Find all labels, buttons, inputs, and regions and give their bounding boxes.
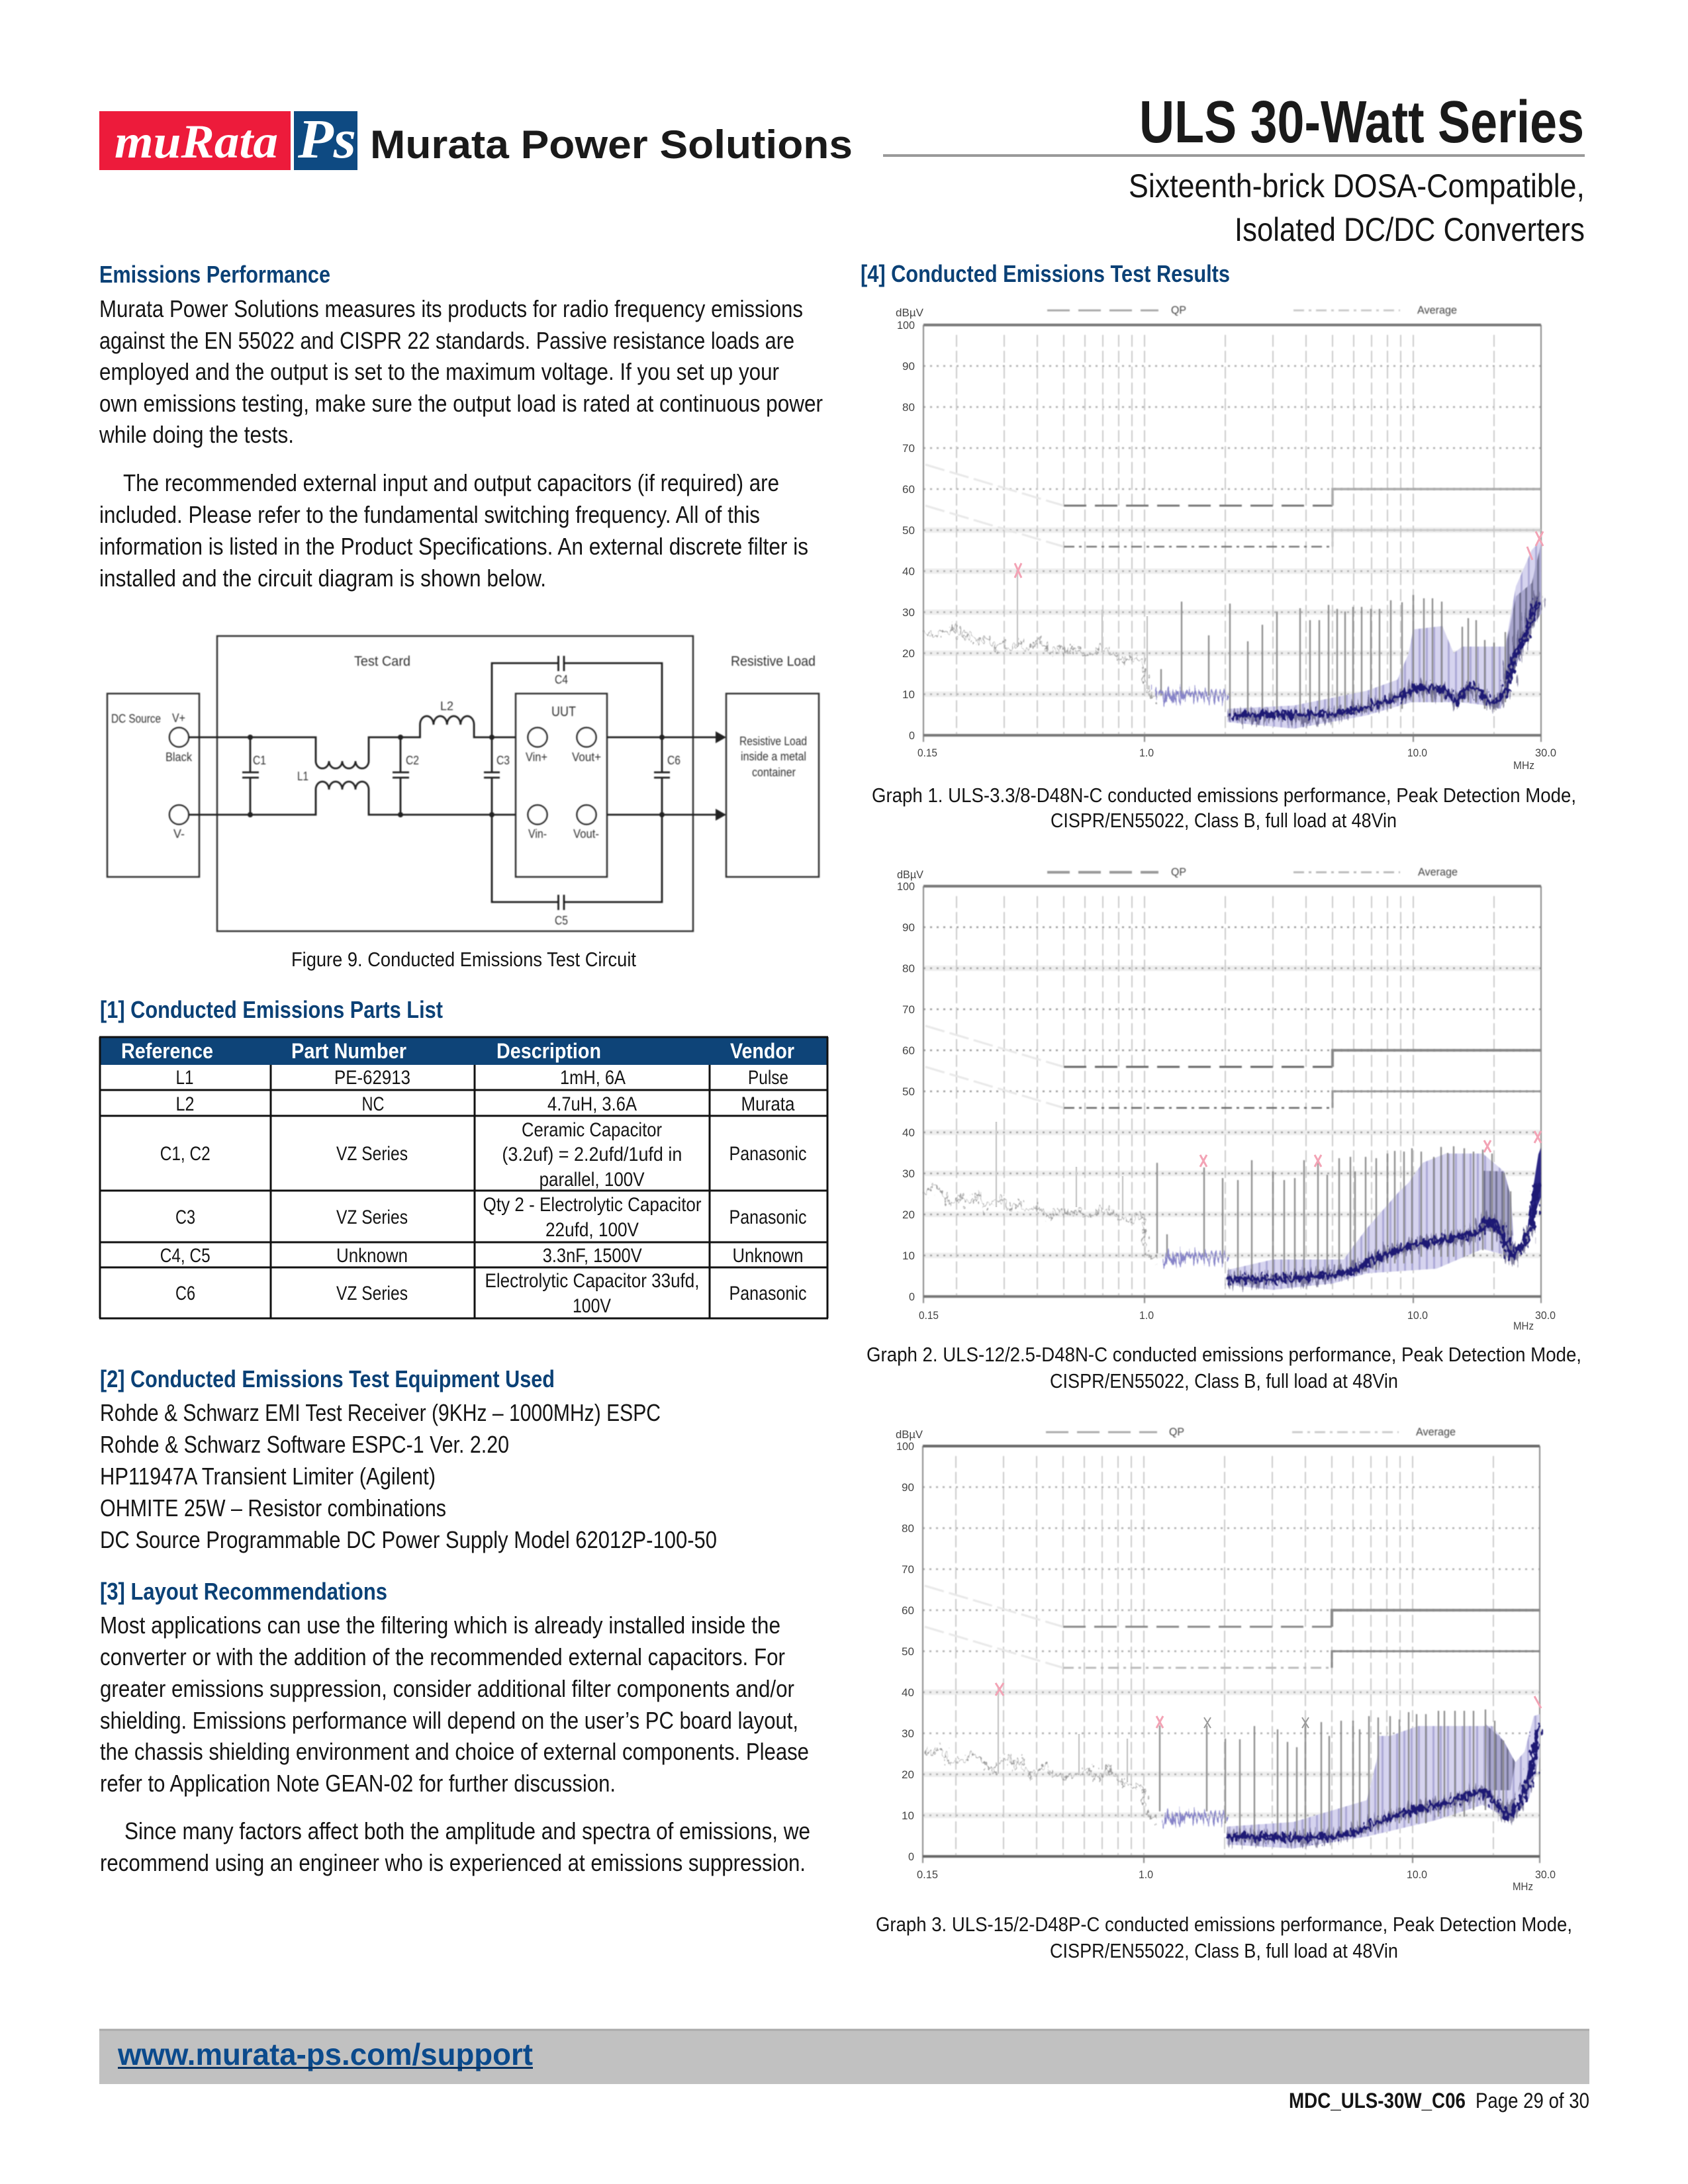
company name: Murata Power Solutions [370, 122, 853, 167]
axis labels: 70 [902, 1563, 914, 1576]
axis labels: 40 [902, 1126, 915, 1139]
axis labels: 90 [902, 1481, 914, 1494]
support link: www.murata-ps.com/support [117, 2037, 533, 2071]
section: emissions performance [99, 261, 823, 592]
table rows: Ceramic Capacitor [522, 1119, 662, 1141]
axis labels: 60 [902, 483, 915, 496]
heading: test results: [4] Conducted Emissions Test Results [861, 260, 1230, 287]
equipment list: OHMITE 25W – Resistor combinations [100, 1494, 446, 1522]
equipment list: Rohde & Schwarz EMI Test Receiver (9KHz – 1000MHz) ESPC [100, 1399, 661, 1426]
table rows: L2 [176, 1093, 195, 1115]
table rows: L1 [176, 1067, 193, 1089]
table rows [160, 1067, 806, 1317]
body text: converter or with the addition of the recommended external capacitors. For [100, 1643, 785, 1670]
axis labels: 0 [909, 1291, 915, 1303]
circuit labels: container [752, 766, 796, 779]
body text: installed and the circuit diagram is shown below. [99, 565, 546, 592]
body text: the chassis shielding environment and choice of external components. Please [100, 1738, 809, 1765]
axis labels [897, 868, 1556, 1332]
axis labels: 50 [902, 524, 915, 537]
subtitle: Isolated DC/DC Converters [1235, 211, 1585, 248]
chart: graph 1 [896, 304, 1556, 772]
axis labels: 60 [902, 1604, 914, 1617]
circuit labels: V- [173, 827, 185, 841]
body text: recommend using an engineer who is experienced at emissions suppression. [100, 1849, 806, 1876]
caption: graph 3 [876, 1913, 1572, 1962]
legend [1047, 304, 1457, 316]
heading: Emissions Performance [99, 261, 330, 288]
axis labels: 0 [909, 729, 915, 742]
axis labels: 100 [897, 319, 915, 332]
terminals [169, 728, 596, 825]
axis labels: 30.0 [1535, 1868, 1556, 1881]
axis labels: 60 [902, 1044, 915, 1057]
table rows: 3.3nF, 1500V [543, 1245, 642, 1267]
circuit labels: C4 [555, 673, 568, 686]
legend [1046, 1426, 1456, 1438]
header logo [99, 109, 853, 170]
table rows: PE-62913 [334, 1067, 410, 1089]
table rows: 4.7uH, 3.6A [547, 1093, 637, 1115]
body text: against the EN 55022 and CISPR 22 standards. Passive resistance loads are [99, 327, 794, 354]
body text: information is listed in the Product Specifications. An external discrete filter is [99, 533, 808, 560]
axis labels: 10 [902, 1250, 915, 1262]
axis labels: 0.15 [917, 1868, 938, 1881]
page reference: Page 29 of 30 [1476, 2089, 1589, 2113]
axis labels: 40 [902, 565, 915, 578]
logo: Murata red block: muRata [115, 115, 278, 168]
junction dots and arrows [248, 731, 726, 821]
axis labels: 30 [902, 606, 915, 619]
circuit labels: V+ [172, 711, 185, 725]
limit lines [925, 1026, 1541, 1108]
equipment list: Rohde & Schwarz Software ESPC-1 Ver. 2.20 [100, 1431, 509, 1458]
axis labels: 1.0 [1139, 1309, 1154, 1322]
boxes [107, 636, 819, 931]
axis labels: 30 [902, 1727, 914, 1740]
series title: ULS 30-Watt Series [1139, 89, 1584, 156]
circuit labels: Vin- [528, 827, 547, 841]
legend: Average [1418, 866, 1458, 878]
axis labels: 70 [902, 1003, 915, 1016]
table rows: Unknown [336, 1245, 408, 1267]
axis labels: 30 [902, 1167, 915, 1180]
body text: while doing the tests. [99, 421, 294, 448]
circuit labels: Vout- [573, 827, 599, 841]
table rows: C6 [175, 1283, 195, 1304]
table header: Part Number [291, 1039, 406, 1063]
legend: Average [1416, 1426, 1456, 1438]
table rows: (3.2uf) = 2.2ufd/1ufd in [502, 1144, 682, 1165]
axis labels: 50 [902, 1085, 915, 1098]
axis labels: 100 [897, 880, 915, 893]
table rows: 1mH, 6A [560, 1067, 626, 1089]
table rows: VZ Series [336, 1283, 408, 1304]
table rows: Panasonic [729, 1283, 806, 1304]
caption: graph 1 [872, 784, 1576, 832]
table header [99, 1037, 828, 1065]
axis labels: 1.0 [1139, 747, 1154, 759]
table rows: 100V [573, 1295, 611, 1317]
axis labels: 80 [902, 962, 915, 975]
table rows: C4, C5 [160, 1245, 211, 1267]
axis labels: 70 [902, 442, 915, 455]
table rows: Unknown [732, 1245, 804, 1267]
table header: Vendor [730, 1039, 794, 1063]
legend: QP [1171, 304, 1186, 316]
wires [189, 656, 718, 910]
section: test equipment [100, 1365, 717, 1553]
grid and axes [923, 886, 1541, 1303]
axis labels: 10.0 [1407, 1868, 1427, 1881]
circuit labels: L2 [440, 700, 453, 713]
circuit labels: Vin+ [526, 751, 547, 764]
circuit labels: C1 [253, 754, 266, 767]
grid and axes [923, 1446, 1540, 1863]
axis labels: dBµV [896, 1428, 923, 1441]
circuit labels [111, 654, 816, 927]
legend: QP [1169, 1426, 1184, 1438]
axis labels: 80 [902, 401, 915, 414]
axis labels [896, 306, 1556, 772]
axis labels: 90 [902, 360, 915, 373]
legend: Average [1417, 304, 1457, 316]
title block [883, 89, 1585, 248]
axis labels: 0.15 [919, 1309, 939, 1322]
chart: graph 2 [897, 866, 1556, 1332]
body text: Murata Power Solutions measures its products for radio frequency emissions [99, 295, 803, 322]
equipment list: HP11947A Transient Limiter (Agilent) [100, 1463, 436, 1490]
table header: Description [496, 1039, 601, 1063]
circuit labels: DC Source [111, 712, 161, 725]
page reference [1289, 2089, 1589, 2113]
axis labels: 0 [908, 1850, 914, 1863]
page reference: MDC_ULS-30W_C06 [1289, 2089, 1466, 2113]
circuit labels: Test Card [354, 654, 410, 669]
table rows: Panasonic [729, 1143, 806, 1165]
axis labels: 20 [902, 1768, 914, 1781]
axis labels: MHz [1513, 759, 1534, 772]
circuit labels: Black [165, 751, 193, 764]
limit lines [925, 465, 1541, 547]
table rows: NC [361, 1093, 384, 1115]
axis labels: dBµV [896, 306, 924, 319]
body text [99, 295, 823, 592]
table rows: C3 [175, 1206, 195, 1228]
traces [925, 1122, 1541, 1290]
limit lines [925, 1586, 1540, 1668]
chart: graph 3 [896, 1426, 1556, 1893]
table rows: C1, C2 [160, 1143, 211, 1165]
figure caption: Figure 9. Conducted Emissions Test Circuit [291, 948, 636, 971]
footer bar [99, 2029, 1589, 2084]
table rows: parallel, 100V [539, 1169, 645, 1191]
circuit labels: L1 [297, 770, 308, 783]
subtitle [1129, 167, 1585, 248]
caption: graph 1: CISPR/EN55022, Class B, full load at 48Vin [1051, 809, 1397, 832]
circuit labels: C6 [667, 754, 680, 767]
axis labels: 10 [902, 1809, 914, 1822]
grid and axes [923, 325, 1541, 742]
table rows: VZ Series [336, 1206, 408, 1228]
body text: included. Please refer to the fundamental switching frequency. All of this [99, 501, 760, 528]
axis labels: 50 [902, 1645, 914, 1658]
axis labels: 20 [902, 1208, 915, 1221]
heading: [2] Conducted Emissions Test Equipment Used [100, 1365, 555, 1392]
body text: shielding. Emissions performance will depend on the user’s PC board layout, [100, 1707, 798, 1734]
caption: graph 1: Graph 1. ULS-3.3/8-D48N-C conducted emissions performance, Peak Detection Mode, [872, 784, 1576, 807]
equipment list: DC Source Programmable DC Power Supply Model 62012P-100-50 [100, 1526, 717, 1553]
axis labels: MHz [1513, 1880, 1533, 1893]
heading: [3] Layout Recommendations [100, 1578, 387, 1605]
axis labels: 0.15 [917, 747, 937, 759]
subtitle: Sixteenth-brick DOSA-Compatible, [1129, 167, 1585, 205]
heading: parts list: [1] Conducted Emissions Parts List [100, 996, 443, 1023]
traces [925, 531, 1543, 729]
body text: Most applications can use the filtering which is already installed inside the [100, 1612, 780, 1639]
table rows: Murata [741, 1093, 795, 1115]
table rows: VZ Series [336, 1143, 408, 1165]
axis labels: 20 [902, 647, 915, 660]
body text [100, 1612, 810, 1876]
parts list table [99, 1037, 828, 1318]
axis labels: 100 [896, 1440, 914, 1453]
body text: greater emissions suppression, consider additional filter components and/or [100, 1675, 794, 1702]
body text: employed and the output is set to the maximum voltage. If you set up your [99, 358, 779, 385]
axis labels: 40 [902, 1686, 914, 1699]
axis labels: 80 [902, 1522, 914, 1535]
circuit labels: C5 [555, 914, 568, 927]
circuit labels: C3 [496, 754, 510, 767]
section: layout recommendations [100, 1578, 810, 1876]
axis labels: 1.0 [1139, 1868, 1153, 1881]
body text: Since many factors affect both the amplitude and spectra of emissions, we [124, 1817, 810, 1844]
table grid [99, 1037, 828, 1318]
table rows: Panasonic [729, 1206, 806, 1228]
caption: graph 2: Graph 2. ULS-12/2.5-D48N-C conducted emissions performance, Peak Detection Mode, [867, 1343, 1581, 1366]
circuit labels: Resistive Load [739, 735, 807, 748]
axis labels: 30.0 [1535, 747, 1556, 759]
logo: Ps blue block: Ps [297, 109, 356, 170]
table rows: Pulse [748, 1067, 788, 1089]
axis labels: 10.0 [1407, 747, 1427, 759]
body text: own emissions testing, make sure the output load is rated at continuous power [99, 390, 823, 417]
axis labels: dBµV [897, 868, 924, 881]
caption: graph 2: CISPR/EN55022, Class B, full load at 48Vin [1050, 1369, 1398, 1392]
equipment list [100, 1399, 717, 1553]
axis labels: MHz [1513, 1320, 1534, 1332]
caption: graph 3: CISPR/EN55022, Class B, full load at 48Vin [1050, 1939, 1398, 1962]
traces [925, 1683, 1541, 1848]
body text: refer to Application Note GEAN-02 for further discussion. [100, 1770, 616, 1797]
axis labels [896, 1428, 1556, 1893]
circuit labels: inside a metal [741, 750, 806, 763]
axis labels: 10.0 [1407, 1309, 1428, 1322]
table rows: Electrolytic Capacitor 33ufd, [485, 1270, 699, 1292]
circuit labels: Vout+ [572, 751, 601, 764]
legend [1047, 866, 1458, 878]
body text: The recommended external input and output capacitors (if required) are [123, 469, 779, 496]
circuit labels: UUT [551, 704, 576, 719]
circuit diagram [107, 636, 819, 931]
legend: QP [1171, 866, 1186, 878]
table rows: Qty 2 - Electrolytic Capacitor [483, 1194, 702, 1216]
axis labels: 90 [902, 921, 915, 934]
table rows: 22ufd, 100V [545, 1219, 639, 1241]
caption: graph 2 [867, 1343, 1581, 1392]
axis labels: 30.0 [1535, 1309, 1556, 1322]
circuit labels: Resistive Load [731, 654, 816, 669]
caption: graph 3: Graph 3. ULS-15/2-D48P-C conducted emissions performance, Peak Detection Mode, [876, 1913, 1572, 1936]
table header: Reference [121, 1039, 213, 1063]
circuit labels: C2 [406, 754, 419, 767]
axis labels: 10 [902, 688, 915, 701]
